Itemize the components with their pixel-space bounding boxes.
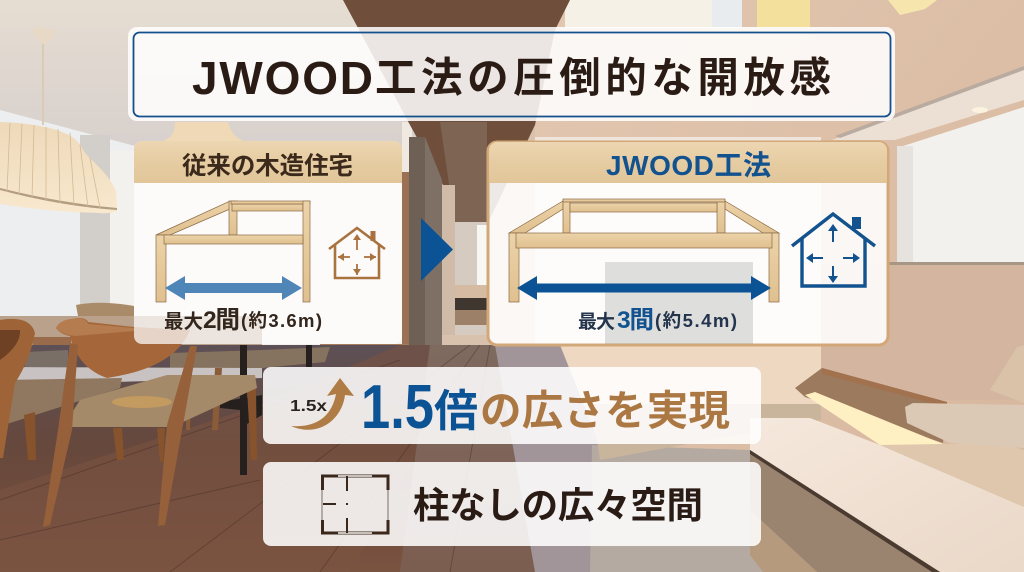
background: left chair <box>0 319 122 460</box>
heading: conventional wooden house: 従来の木造住宅 <box>182 152 353 180</box>
heading: JWOOD method: JWOOD工法 <box>606 150 771 181</box>
highlight text: bai: 倍 <box>434 387 478 436</box>
span label: conventional: 最大 <box>164 311 203 333</box>
arrow: conventional to JWOOD <box>421 218 453 281</box>
span label: JWOOD: 最大 <box>578 311 615 333</box>
feature bar: 1.5x width <box>263 367 761 444</box>
panel: conventional wooden house <box>134 141 402 344</box>
feature bar: no columns <box>263 462 761 546</box>
feature text: column-free wide space: 柱なしの広々空間 <box>413 485 703 526</box>
background: table legs <box>220 345 312 475</box>
background: second pendant lamp <box>163 122 244 141</box>
span label: conventional: (約3.6m) <box>241 310 322 331</box>
frame diagram: conventional 2-ken span <box>156 201 310 302</box>
span label: JWOOD: (約5.4m) <box>655 310 737 331</box>
panel: JWOOD method <box>488 142 888 345</box>
title text: JWOOD <box>192 52 373 104</box>
icon: growth arrow 1.5x: 1.5x <box>290 398 327 415</box>
background: pendant lamp left <box>0 27 117 213</box>
highlight text: 1.5 times: 1.5 <box>361 373 434 442</box>
icon: floor plan <box>322 476 388 533</box>
span label: JWOOD <box>578 307 737 334</box>
panel header: conventional <box>134 141 402 183</box>
span arrow: JWOOD <box>517 276 771 300</box>
frame diagram: JWOOD 3-ken span <box>509 199 779 302</box>
icon: growth arrow 1.5x <box>290 378 354 430</box>
span label: conventional: 2間 <box>203 307 240 334</box>
title text: 工法の圧倒的な開放感 <box>375 54 831 101</box>
icon: small house with expansion arrows <box>329 228 385 278</box>
feature text: spaciousness: の広さを実現 <box>480 387 730 434</box>
span label: conventional <box>164 307 322 334</box>
background: rear chairs <box>0 303 330 430</box>
title panel <box>128 27 895 121</box>
span arrow: conventional <box>165 276 302 300</box>
icon: large house with expansion arrows <box>792 214 875 286</box>
span label: JWOOD: 3間 <box>617 307 654 334</box>
panel header: JWOOD <box>489 142 887 183</box>
background: front chair <box>43 318 257 527</box>
title text <box>192 52 831 104</box>
